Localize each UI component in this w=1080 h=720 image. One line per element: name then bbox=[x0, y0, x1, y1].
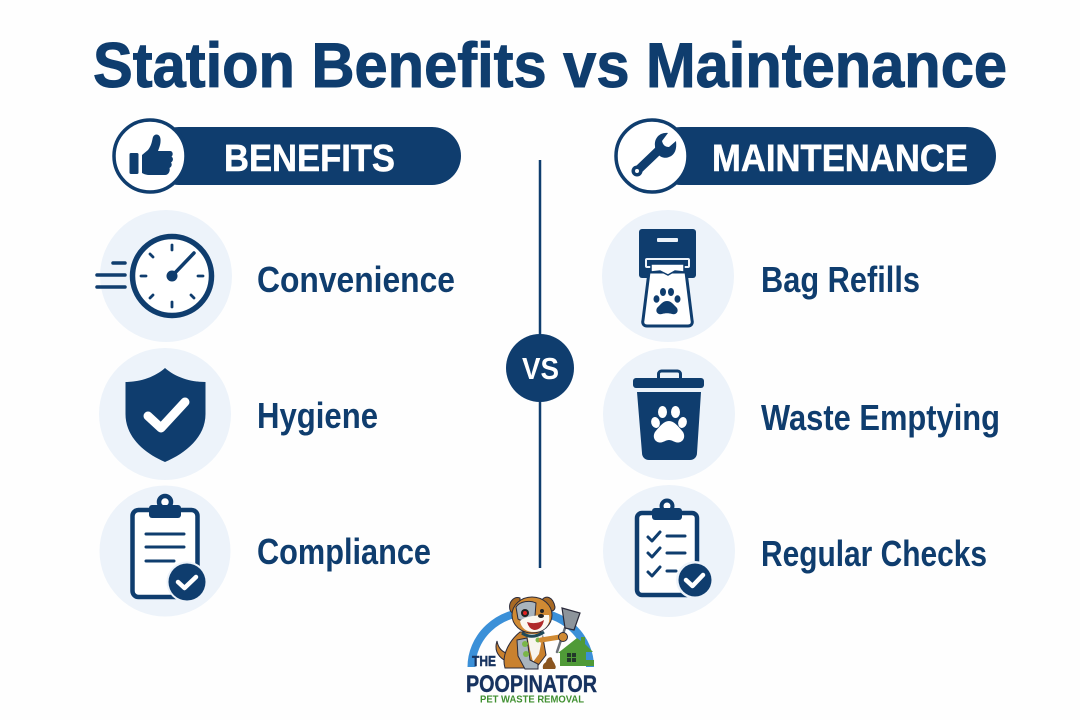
benefits header pill bbox=[114, 120, 461, 192]
hygiene row bbox=[99, 348, 378, 480]
center divider with VS badge bbox=[506, 160, 574, 568]
bag refills row bbox=[602, 210, 920, 342]
logo arc bbox=[472, 612, 590, 667]
waste emptying row bbox=[603, 348, 1000, 480]
waste emptying row: Waste Emptying bbox=[761, 397, 1000, 438]
logo: The Poopinator bbox=[466, 597, 597, 706]
maintenance header pill: MAINTENANCE bbox=[712, 138, 968, 180]
benefits header pill: BENEFITS bbox=[224, 138, 395, 180]
logo text: the: THE bbox=[472, 653, 496, 670]
bag refills row: Bag Refills bbox=[761, 259, 920, 300]
logo text: pet waste removal: PET WASTE REMOVAL bbox=[480, 694, 584, 706]
regular checks row bbox=[603, 485, 987, 617]
compliance row: Compliance bbox=[257, 531, 431, 572]
panel: maintenance bbox=[602, 120, 1000, 617]
panel: benefits bbox=[97, 120, 461, 616]
hygiene row: Hygiene bbox=[257, 395, 378, 436]
center divider with VS badge: VS bbox=[522, 351, 559, 386]
maintenance header pill bbox=[616, 120, 996, 192]
convenience row bbox=[97, 210, 455, 342]
logo house bbox=[558, 637, 594, 666]
logo text: poopinator: POOPINATOR bbox=[466, 671, 597, 698]
title: Station Benefits vs Maintenance bbox=[93, 31, 1007, 101]
regular checks row: Regular Checks bbox=[761, 533, 987, 574]
logo dog mascot bbox=[496, 597, 580, 669]
compliance row bbox=[100, 486, 431, 616]
convenience row: Convenience bbox=[257, 259, 455, 300]
